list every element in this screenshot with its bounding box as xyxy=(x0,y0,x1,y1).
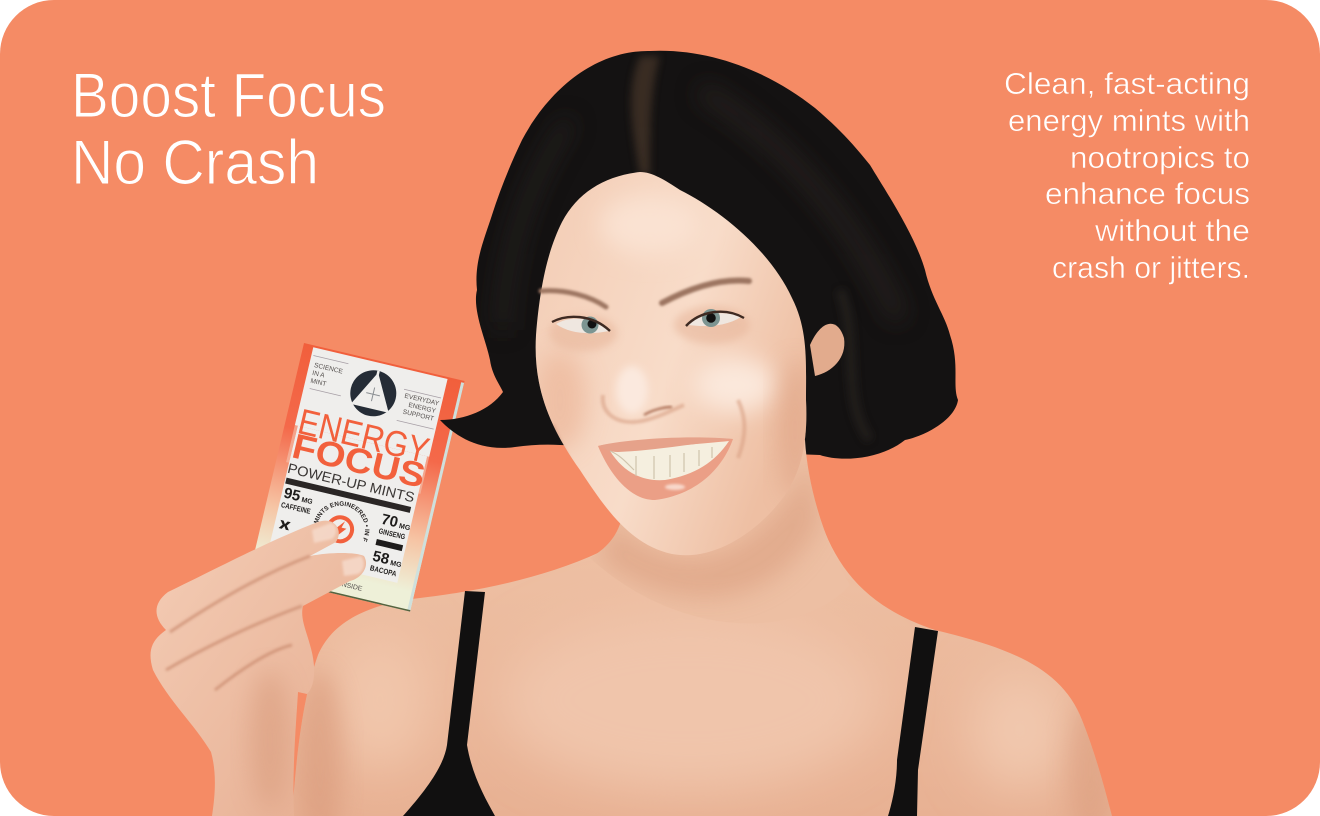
product box: Energy Focus power-up mints: SCIENCE xyxy=(313,362,344,376)
photo: smiling woman holding mint box xyxy=(150,50,1112,816)
title: No Crash xyxy=(71,128,319,198)
product box: Energy Focus power-up mints: ENERGY xyxy=(294,400,433,471)
product box: Energy Focus power-up mints xyxy=(255,343,464,612)
logo mark xyxy=(350,370,396,416)
eye socket shading xyxy=(549,315,617,351)
product box: Energy Focus power-up mints: BACOPA xyxy=(369,563,398,578)
neck xyxy=(597,440,826,606)
description text block xyxy=(1004,66,1250,285)
product box: Energy Focus power-up mints: NTS INSIDE xyxy=(324,577,363,593)
product box: Energy Focus power-up mints: 58 MG xyxy=(371,548,404,571)
description text block: crash or jitters. xyxy=(1052,250,1250,285)
product box: Energy Focus power-up mints: GINSENG xyxy=(378,526,406,541)
description text block: nootropics to xyxy=(1070,140,1250,175)
product box: Energy Focus power-up mints: 95 MG xyxy=(282,485,316,508)
product box: Energy Focus power-up mints: SUPPORT xyxy=(402,409,434,423)
product box: Energy Focus power-up mints: 70 MG xyxy=(380,511,413,534)
fingernails xyxy=(312,523,364,576)
ear xyxy=(810,324,844,376)
description text block: enhance focus xyxy=(1045,176,1250,211)
product box: Energy Focus power-up mints: MINTS ENGINEERED • IN FOCUS xyxy=(314,501,370,542)
product box: Energy Focus power-up mints: MINT xyxy=(310,378,327,388)
product box: Energy Focus power-up mints: EVERYDAY xyxy=(404,393,440,408)
nose xyxy=(603,366,684,422)
description text block: without the xyxy=(1094,213,1250,248)
title: Boost Focus xyxy=(71,61,386,131)
hand holding the box xyxy=(151,521,366,816)
description text block: Clean, fast-acting xyxy=(1004,66,1250,101)
eye left xyxy=(552,316,610,334)
product box: Energy Focus power-up mints: CAFFEINE xyxy=(280,500,311,516)
product box: Energy Focus power-up mints: IN A xyxy=(311,370,326,380)
smile lines xyxy=(553,398,747,458)
eye right xyxy=(686,309,744,327)
product box: Energy Focus power-up mints: POWER-UP MINTS xyxy=(286,460,416,505)
product box: Energy Focus power-up mints: FOCUS xyxy=(289,427,429,496)
face xyxy=(534,172,811,555)
black top straps xyxy=(403,591,938,816)
black bob hair xyxy=(440,51,958,459)
mouth with teeth xyxy=(598,437,733,500)
product box: Energy Focus power-up mints: ENERGY xyxy=(408,402,437,415)
eyebrows xyxy=(541,280,749,307)
description text block: energy mints with xyxy=(1008,103,1250,138)
shoulders and chest xyxy=(294,532,1112,816)
title xyxy=(71,61,386,198)
